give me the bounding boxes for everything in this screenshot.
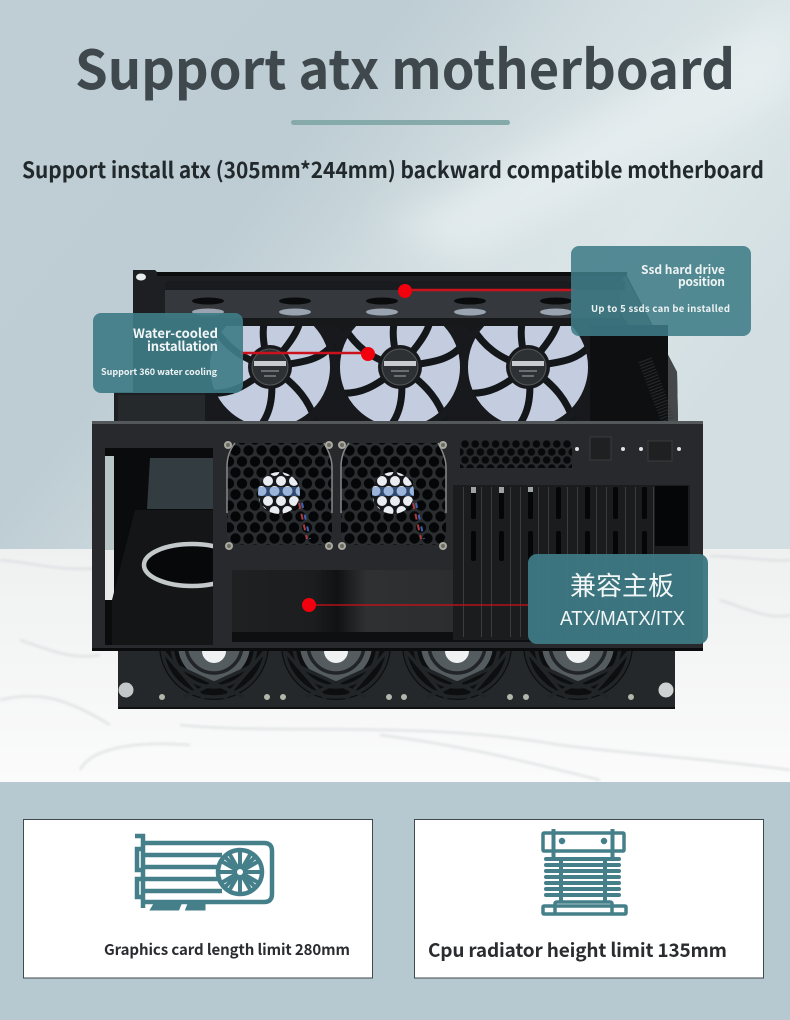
top vent holes bbox=[460, 440, 572, 468]
callout: ssd hard drive position: Ssd hard drive bbox=[641, 261, 725, 278]
panel: cpu radiator limit bbox=[414, 820, 764, 978]
callout: ssd hard drive position bbox=[571, 246, 751, 336]
callout: ssd hard drive position: Up to 5 ssds can be installed bbox=[591, 301, 730, 315]
callout line: water cooling bbox=[240, 347, 375, 361]
callout: compatible motherboards bbox=[528, 554, 708, 644]
panel: graphics card limit bbox=[24, 820, 372, 978]
label: graphics card length: Graphics card length limit 280mm bbox=[104, 939, 350, 960]
subtitle: Support install atx (305mm*244mm) backward compatible motherboard bbox=[22, 153, 764, 185]
front panel bbox=[92, 421, 703, 651]
callout: water-cooled installation: Water-cooled bbox=[133, 323, 218, 342]
title: Support atx motherboard bbox=[75, 26, 735, 105]
callout line: ssd position bbox=[398, 284, 575, 298]
fans behind the panel bbox=[208, 326, 588, 421]
bottom fan tray bbox=[118, 590, 675, 709]
title underline bbox=[291, 120, 510, 125]
rear chassis body bbox=[114, 270, 678, 421]
drive bay recess bbox=[232, 570, 532, 642]
callout: water-cooled installation bbox=[93, 313, 243, 393]
product photo: server chassis bbox=[92, 270, 703, 709]
callout: water-cooled installation: Support 360 water cooling bbox=[101, 365, 218, 378]
exhaust fan grills bbox=[227, 443, 446, 545]
callout: water-cooled installation: installation bbox=[147, 336, 218, 355]
left opening with bay bbox=[105, 448, 240, 645]
callout: compatible motherboards: 兼容主板 bbox=[570, 571, 674, 601]
icon: graphics card bbox=[135, 836, 272, 909]
callout: compatible motherboards: ATX/MATX/ITX bbox=[560, 608, 685, 630]
expansion slots bbox=[453, 485, 690, 640]
callout line: motherboard bbox=[302, 598, 530, 612]
icon: cpu radiator bbox=[543, 829, 626, 914]
label: cpu radiator height: Cpu radiator height limit 135mm bbox=[428, 936, 727, 963]
callout: ssd hard drive position: position bbox=[678, 273, 725, 290]
